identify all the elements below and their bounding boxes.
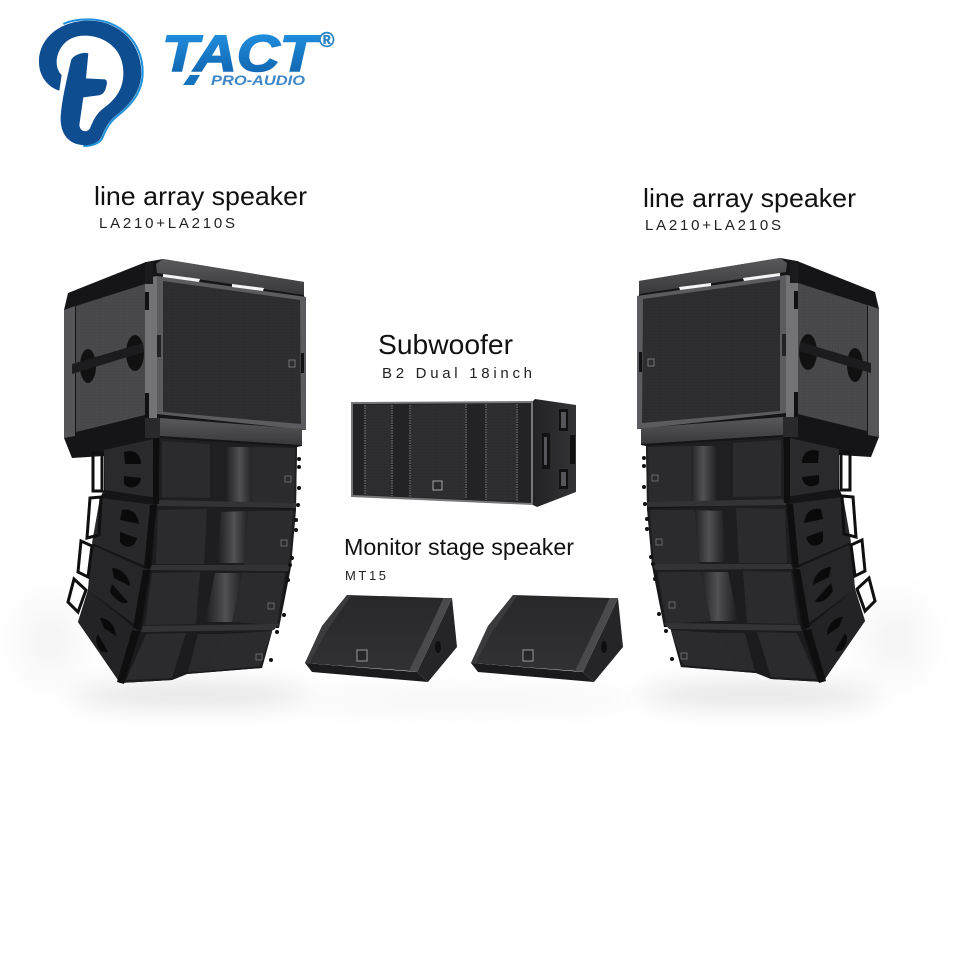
speaker: right line array stack bbox=[637, 258, 879, 683]
label: subwoofer bbox=[378, 329, 532, 382]
icon: ear-shaped t emblem bbox=[39, 19, 143, 146]
model: LA210+LA210S bbox=[99, 215, 235, 232]
speaker: monitor left bbox=[305, 595, 457, 682]
icon: registered mark: ® bbox=[319, 29, 335, 52]
speaker: left line array stack bbox=[64, 259, 306, 684]
heading: Subwoofer bbox=[378, 329, 513, 360]
tagline: PRO-AUDIO: PRO-AUDIO bbox=[211, 72, 305, 88]
speaker: monitor right bbox=[471, 595, 623, 682]
model: B2 Dual 18inch bbox=[382, 365, 532, 382]
heading: line array speaker bbox=[94, 181, 307, 211]
background shadows bbox=[22, 600, 923, 710]
label: right line array bbox=[643, 183, 856, 234]
speaker: subwoofer B2 bbox=[351, 399, 576, 507]
model: LA210+LA210S bbox=[645, 217, 781, 234]
heading: Monitor stage speaker bbox=[344, 534, 574, 560]
icon: T slash bbox=[183, 75, 200, 85]
label: monitor bbox=[344, 534, 574, 583]
heading: line array speaker bbox=[643, 183, 856, 213]
label: left line array bbox=[94, 181, 307, 232]
wordmark: TACT: TACT bbox=[162, 25, 320, 82]
logo: TACT Pro-Audio bbox=[39, 19, 335, 146]
model: MT15 bbox=[345, 568, 386, 583]
